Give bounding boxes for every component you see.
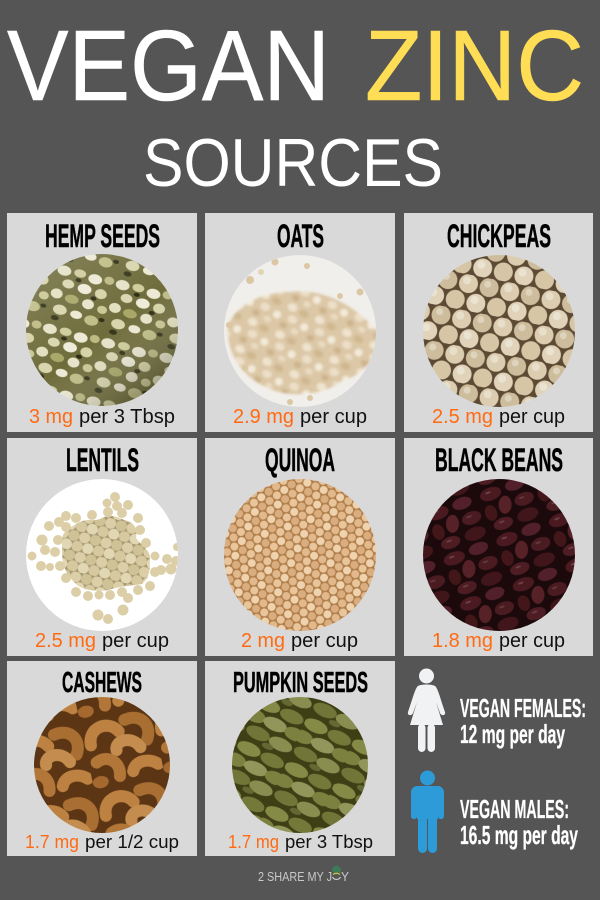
panel: cashews (7, 661, 197, 856)
amount: black beans (432, 630, 565, 652)
amount: quinoa: 2 mg (241, 630, 285, 652)
amount: black beans: 1.8 mg (432, 630, 493, 652)
panel: oats (205, 213, 395, 432)
panel: quinoa (205, 438, 395, 656)
photo: lentils (26, 479, 181, 631)
amount: hemp seeds: per 3 Tbsp (79, 406, 175, 428)
text: vegan females (460, 693, 586, 749)
photo: cashews (34, 697, 170, 833)
heading: oats: OATS (277, 218, 324, 254)
photo: quinoa (224, 479, 376, 631)
footer logo: 2 share my joy: Y (341, 870, 350, 884)
amount: lentils: 2.5 mg (35, 630, 96, 652)
amount: chickpeas: 2.5 mg (432, 406, 493, 428)
photo: chickpeas (423, 255, 575, 407)
heading: quinoa: QUINOA (265, 442, 335, 478)
panel: black beans (404, 438, 593, 656)
panel: chickpeas (404, 213, 593, 432)
panel: lentils (7, 438, 197, 656)
amount: lentils (35, 630, 169, 652)
amount: chickpeas: per cup (499, 406, 565, 428)
amount: hemp seeds (29, 406, 175, 428)
amount: lentils: per cup (102, 630, 169, 652)
icon: male figure (411, 770, 444, 853)
subtitle: SOURCES: SOURCES (143, 125, 443, 201)
title: VEGAN ZINC: ZINC (365, 10, 584, 122)
panel: pumpkin seeds (205, 661, 395, 856)
amount: quinoa: per cup (291, 630, 358, 652)
heading: hemp seeds: HEMP SEEDS (45, 218, 160, 254)
heading: cashews: CASHEWS (62, 667, 142, 699)
heading: lentils: LENTILS (66, 442, 139, 478)
photo: oats (224, 255, 378, 407)
amount: pumpkin seeds: 1.7 mg (228, 832, 279, 852)
photo: pumpkin seeds (232, 697, 368, 833)
photo: black beans (423, 479, 575, 631)
icon: female figure (408, 668, 445, 752)
amount: oats (233, 406, 367, 428)
amount: quinoa (241, 630, 358, 652)
heading: pumpkin seeds: PUMPKIN SEEDS (233, 667, 368, 699)
panel: hemp seeds (7, 213, 197, 432)
footer logo: 2 share my joy: 2 SHARE MY J (258, 870, 332, 884)
amount: pumpkin seeds (228, 832, 373, 852)
title: VEGAN ZINC: VEGAN (7, 10, 330, 122)
amount: oats: 2.9 mg (233, 406, 294, 428)
photo: hemp seeds (26, 254, 178, 406)
amount: hemp seeds: 3 mg (29, 406, 73, 428)
amount: cashews: per 1/2 cup (85, 832, 179, 852)
text: vegan males (460, 794, 578, 850)
amount: cashews (25, 832, 179, 852)
amount: black beans: per cup (499, 630, 565, 652)
amount: pumpkin seeds: per 3 Tbsp (285, 832, 373, 852)
title: VEGAN ZINC (7, 10, 584, 122)
amount: oats: per cup (300, 406, 367, 428)
amount: chickpeas (432, 406, 565, 428)
amount: cashews: 1.7 mg (25, 832, 79, 852)
